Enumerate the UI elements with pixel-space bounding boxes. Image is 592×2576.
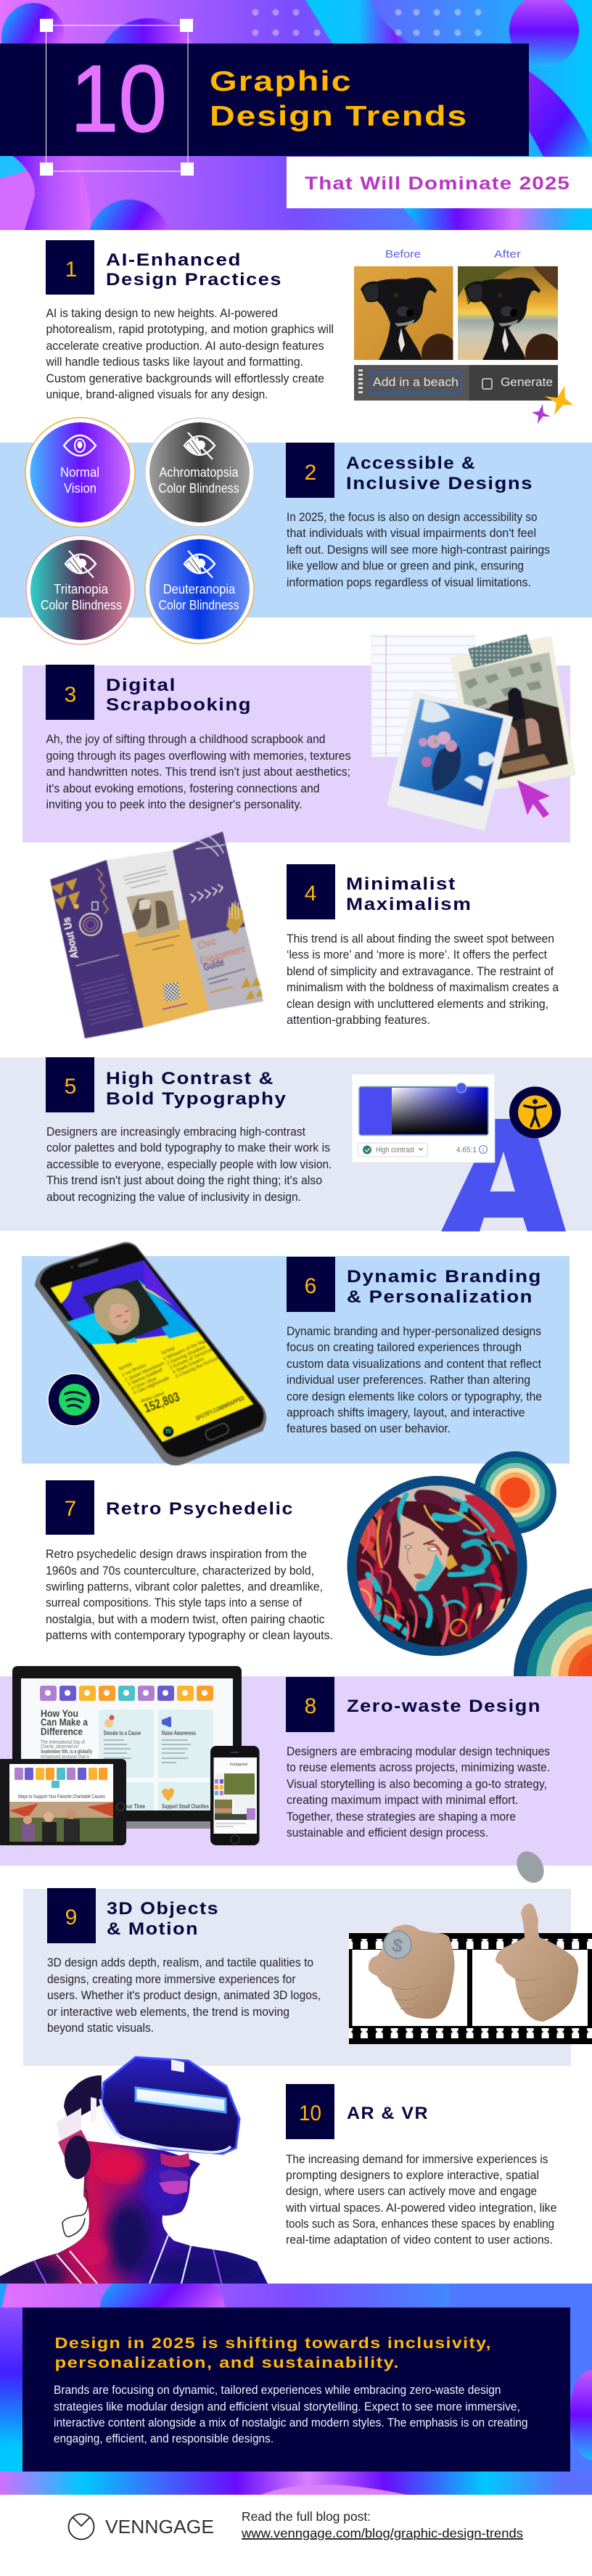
heading 1: Design Practices — [106, 270, 282, 290]
conclusion banner — [0, 2268, 592, 2495]
tablet: Ways to Support Your Favorite Charitable Causes — [18, 1793, 105, 1800]
heading 8: Zero-waste Design — [347, 1697, 541, 1716]
number badge 5: 5 — [65, 1075, 76, 1099]
circle: deuteranopia — [145, 535, 254, 644]
body text 8: creating maximum impact with minimal effort. — [287, 1793, 518, 1807]
heading 3: Digital — [106, 676, 176, 695]
concentric rings small — [474, 1451, 556, 1534]
image: responsive devices mockup — [0, 1666, 260, 1845]
selection frame — [40, 19, 194, 176]
circle: achromatopsia: Color Blindness — [158, 481, 239, 496]
laptop: Donate to a Cause — [104, 1730, 141, 1736]
blog link: Read the full blog post: — [242, 2509, 371, 2524]
body text 1: photorealism, rapid prototyping, and motion graphics will — [46, 322, 334, 336]
image: brochure: Guide — [202, 956, 226, 973]
image: phone with wrapped screen: SPOTIFY.COM/WRAPPED — [194, 1394, 246, 1422]
body text 4: clean design with uncluttered elements and striking, — [287, 997, 548, 1011]
panel: trend 2 — [0, 418, 592, 644]
body text 2: In 2025, the focus is also on design accessibility so — [287, 510, 537, 524]
body text 7: patterns with contemporary typography or clean layouts. — [46, 1628, 333, 1642]
body text 6: custom data visualizations and content that reflect — [287, 1357, 541, 1371]
body text 10: prompting designers to explore interactive, spatial — [286, 2168, 539, 2182]
body text 2 — [287, 510, 550, 589]
number badge 10 — [286, 2084, 334, 2139]
circle: deuteranopia: Color Blindness — [158, 598, 239, 612]
body text 5: accessible to everyone, especially people with low vision. — [46, 1157, 332, 1171]
blog link: www.venngage.com/blog/graphic-design-trends — [241, 2526, 523, 2540]
heading 3 — [106, 676, 252, 715]
panel: trend 8 — [0, 1666, 592, 1887]
heading 6: & Personalization — [347, 1287, 533, 1307]
number badge 6: 6 — [305, 1274, 316, 1298]
prompt bar: Generate — [501, 375, 553, 389]
panel: trend 10 — [0, 2057, 557, 2289]
heading 3: Scrapbooking — [106, 695, 252, 715]
body text 7: nostalgia, but with a modern twist, often pairing chaotic — [46, 1612, 325, 1626]
body text 5 — [46, 1125, 332, 1204]
body text 10: with virtual spaces. AI-powered video integration, like — [285, 2201, 557, 2215]
panel: trend 4 — [50, 832, 559, 1038]
title: Design Trends — [210, 101, 468, 132]
number badge 5 — [46, 1057, 94, 1112]
big number 10: 10 — [70, 45, 167, 152]
number badge 4: 4 — [305, 882, 316, 906]
laptop: How You — [41, 1707, 78, 1719]
body text 8: to reuse elements across projects, minimizing waste. — [287, 1760, 550, 1774]
title band — [0, 44, 529, 156]
circle: tritanopia: Color Blindness — [41, 598, 122, 612]
heading 5 — [106, 1069, 287, 1109]
icon: hand with coin: $ — [390, 1934, 406, 1957]
heading 9 — [107, 1899, 219, 1939]
number badge 2 — [286, 443, 334, 498]
number badge 4 — [287, 864, 335, 919]
heading 9: 3D Objects — [107, 1899, 219, 1919]
concentric rings large — [514, 1588, 592, 1676]
body text 9: users. Whether it's product design, animated 3D logos, — [47, 1988, 321, 2002]
circle: deuteranopia: Deuteranopia — [163, 582, 236, 596]
laptop: Difference — [41, 1726, 83, 1737]
image: phone with wrapped screen: 2 Dancing Shadows — [166, 1345, 207, 1366]
body text 1 — [46, 306, 334, 401]
body text 8: Together, these strategies are shaping a more — [287, 1810, 516, 1824]
contrast checker card: High contrast — [376, 1146, 414, 1154]
body text 8: sustainable and efficient design process. — [287, 1826, 488, 1839]
laptop: Raise Awareness — [162, 1730, 196, 1736]
laptop: The International Day of — [41, 1740, 85, 1745]
icon: spinning coin — [511, 1847, 549, 1887]
image: phone with wrapped screen: 5 Chasing the Horizon — [175, 1355, 220, 1379]
body text 8: Visual storytelling is also becoming a go-to strategy, — [287, 1777, 547, 1791]
body text 10: The increasing demand for immersive experiences is — [286, 2152, 548, 2166]
body text 1: accelerate creative production. AI auto-design features — [46, 339, 324, 353]
laptop — [12, 1666, 242, 1829]
body text 6: focus on creating tailored experiences through — [287, 1340, 522, 1354]
body text 6: core design elements like colors or typography, the — [287, 1390, 542, 1403]
body text 3 — [46, 732, 351, 811]
image: phone with wrapped screen: 1 Whispers of the Night — [163, 1337, 210, 1362]
panel: trend 9 — [23, 1888, 592, 2066]
tablet — [0, 1759, 126, 1845]
body text 7 — [46, 1547, 333, 1642]
image: scrapbook collage — [371, 634, 576, 831]
image: brochure: Engagement — [198, 943, 246, 967]
image: phone with wrapped screen: 4 Starlit Dreams — [172, 1356, 205, 1375]
body text 3: inviting you to peek into the designer's personality. — [46, 797, 302, 811]
smartphone: Instagram — [230, 1763, 248, 1767]
heading 4 — [346, 874, 472, 914]
number badge 8 — [286, 1677, 334, 1732]
image: phone with wrapped screen: 152,803 — [142, 1390, 181, 1416]
body text 2: left out. Designs will see more high-contrast pairings — [287, 543, 550, 557]
circle: achromatopsia — [145, 418, 254, 527]
panel: trend 3 — [22, 634, 576, 842]
smartphone — [210, 1746, 260, 1845]
circle: normal vision: Vision — [64, 481, 96, 496]
laptop: Charity, observed on — [41, 1744, 78, 1750]
icon: cursor arrow — [517, 780, 550, 818]
footer — [68, 2509, 523, 2540]
image: phone with wrapped screen: Minutes Listened — [140, 1391, 165, 1404]
number badge 3: 3 — [65, 683, 76, 707]
body text 4 — [287, 932, 559, 1027]
number badge 6 — [287, 1257, 335, 1312]
body text 7: surreal compositions. This style taps into a sense of — [46, 1596, 302, 1609]
conclusion body text: interactive content alongside a mix of nostalgic and modern styles. The emphasis is on creating — [54, 2416, 528, 2429]
panel: trend 5 — [0, 1057, 592, 1231]
heading 2: Accessible & — [346, 454, 476, 473]
heading 6: Dynamic Branding — [347, 1267, 542, 1287]
image: phone with wrapped screen: 4 Orion Skye — [131, 1376, 157, 1392]
body text 1: AI is taking design to new heights. AI-powered — [46, 306, 278, 320]
venngage logo: VENNGAGE — [105, 2516, 214, 2538]
body text 10: tools such as Sora, enhances these spaces by enabling — [286, 2217, 554, 2231]
headset — [100, 2057, 239, 2154]
body text 9: or interactive web elements, the trend is moving — [47, 2005, 289, 2019]
number badge 1 — [46, 240, 94, 295]
subtitle box: That Will Dominate 2025 — [305, 173, 570, 194]
body text 9: designs, creating more immersive experiences for — [47, 1972, 296, 1986]
image: brochure: About Us — [60, 916, 81, 960]
body text 7: swirling patterns, vibrant color palettes, and dreamlike, — [46, 1580, 323, 1593]
image: phone with wrapped screen: Top Artists — [118, 1361, 133, 1372]
body text 5: Designers are increasingly embracing high-contrast — [46, 1125, 305, 1139]
heading 6 — [347, 1267, 542, 1307]
title — [210, 66, 468, 132]
body text 10: real-time adaptation of video content to user actions. — [286, 2233, 553, 2247]
panel: trend 7 — [46, 1451, 592, 1676]
image: phone with wrapped screen: 1 Ivy Brooks — [121, 1363, 147, 1378]
icon: spotify badge — [48, 1374, 100, 1426]
conclusion heading — [55, 2335, 492, 2371]
conclusion heading: personalization, and sustainability. — [55, 2355, 400, 2371]
body text 5: This trend isn't just about doing the right thing; it's also — [46, 1173, 322, 1187]
blog link — [241, 2509, 523, 2540]
body text 7: Retro psychedelic design draws inspiration from the — [46, 1547, 307, 1561]
contrast checker card — [352, 1074, 495, 1162]
icon: thumbs-up hand — [496, 1903, 578, 2022]
conclusion box — [22, 2308, 570, 2472]
panel: trend 6 — [22, 1242, 570, 1466]
before and after images: After — [494, 248, 521, 261]
body text 8 — [287, 1744, 550, 1839]
laptop: recognized occasion that is — [41, 1755, 89, 1760]
number badge 9 — [47, 1888, 96, 1943]
prompt bar — [354, 365, 558, 401]
heading 2 — [346, 454, 533, 493]
subtitle box — [287, 157, 592, 208]
body text 4: minimalism with the boldness of maximalism creates a — [287, 980, 559, 994]
contrast checker card: 4.65:1 — [456, 1146, 477, 1154]
icon: sparkle stars — [532, 386, 573, 424]
circle: normal vision: Normal — [60, 465, 99, 480]
number badge 7 — [46, 1480, 94, 1535]
body text 3: and handwritten notes. This trend isn't just about aesthetics; — [46, 765, 350, 779]
body text 2: that individuals with visual impairments don't feel — [287, 526, 536, 540]
body text 5: about recognizing the value of inclusivity in design. — [46, 1190, 301, 1204]
header banner — [0, 0, 592, 230]
heading 10: AR & VR — [347, 2104, 429, 2123]
image: phone with wrapped screen: 2 Jasper Moonbeam — [124, 1361, 165, 1383]
prompt bar: Add in a beach — [373, 375, 459, 389]
heading 4: Maximalism — [346, 895, 472, 914]
number badge 10: 10 — [299, 2101, 321, 2125]
conclusion body text: strategies like modular design and efficient visual storytelling. Expect to see more immersive, — [54, 2400, 520, 2413]
body text 9 — [47, 1956, 321, 2035]
circle: tritanopia: Tritanopia — [54, 582, 109, 596]
body text 1: will handle tedious tasks like layout and formatting. — [46, 355, 303, 369]
conclusion heading: Design in 2025 is shifting towards inclusivity, — [55, 2335, 492, 2352]
number badge 3 — [46, 665, 94, 720]
image: phone with wrapped screen: 5 Cleo Nightshade — [133, 1376, 170, 1396]
conclusion body text: Brands are focusing on dynamic, tailored experiences while embracing zero-waste design — [54, 2383, 501, 2397]
icon: accessibility — [509, 1087, 561, 1138]
contrast checker card: i — [482, 1147, 484, 1154]
body text 6 — [287, 1324, 542, 1435]
heading 4: Minimalist — [346, 874, 456, 894]
heading 5: High Contrast & — [106, 1069, 274, 1088]
body text 6: Dynamic branding and hyper-personalized designs — [287, 1324, 541, 1338]
heading 1: AI-Enhanced — [106, 250, 242, 270]
body text 6: individual user preferences. Rather than altering — [287, 1373, 530, 1387]
body text 2: like yellow and blue or green and pink, ensuring — [287, 559, 524, 573]
conclusion body text — [54, 2383, 528, 2445]
circle: normal vision — [25, 418, 135, 527]
body text 7: 1960s and 70s counterculture, characterized by bold, — [46, 1564, 314, 1578]
body text 3: it's about evoking emotions, fostering connections and — [46, 782, 319, 795]
body text 1: unique, brand-aligned visuals for any design. — [46, 387, 268, 401]
image: phone with wrapped screen: 3 Sienna Goldleaf — [127, 1367, 163, 1387]
body text 2: information pops regardless of visual limitations. — [287, 575, 531, 589]
laptop: Support Small Charities — [162, 1803, 209, 1810]
venngage logo — [68, 2514, 214, 2540]
body text 10 — [285, 2152, 557, 2247]
laptop: September 5th, is a globally — [41, 1750, 92, 1755]
body text 8: Designers are embracing modular design techniques — [287, 1744, 550, 1758]
heading 1 — [106, 250, 282, 290]
circle: achromatopsia: Achromatopsia — [160, 465, 239, 480]
heading 7: Retro Psychedelic — [106, 1499, 294, 1519]
laptop: Can Make a — [41, 1716, 88, 1728]
title: Graphic — [210, 66, 353, 97]
body text 4: blend of simplicity and extravagance. The restraint of — [287, 964, 554, 978]
body text 10: design, where users can actively move and engage — [286, 2184, 537, 2198]
image: brochure: Civic — [196, 935, 218, 951]
number badge 9: 9 — [65, 1906, 77, 1929]
panel: trend 1 — [46, 240, 573, 424]
body text 1: Custom generative backgrounds will effortlessly create — [46, 372, 324, 385]
body text 6: features based on user behavior. — [287, 1422, 451, 1435]
image: phone with wrapped screen: Top Songs — [160, 1345, 176, 1356]
film strip — [349, 1933, 592, 2044]
image: person in VR headset — [0, 2057, 268, 2289]
heading 5: Bold Typography — [106, 1089, 287, 1109]
image: brochure — [50, 832, 263, 1038]
big letter A — [441, 1119, 566, 1231]
conclusion body text: engaging, efficient, and responsible designs. — [54, 2432, 274, 2445]
image: psychedelic portrait — [347, 1476, 527, 1656]
icon: hand with coin — [369, 1924, 455, 2019]
laptop: our Time — [125, 1803, 145, 1810]
before and after images — [354, 250, 558, 360]
number badge 7: 7 — [65, 1497, 76, 1521]
body text 3: going through its pages overflowing with memories, textures — [46, 749, 351, 763]
number badge 8: 8 — [305, 1694, 316, 1718]
body text 4: ‘less is more’ and ‘more is more’. It offers the perfect — [287, 948, 547, 961]
body text 4: This trend is all about finding the sweet spot between — [287, 932, 554, 946]
body text 9: 3D design adds depth, realism, and tactile qualities to — [47, 1956, 313, 1969]
image: phone with wrapped screen — [35, 1242, 266, 1466]
circle: tritanopia — [26, 536, 135, 644]
before and after images: Before — [385, 248, 421, 261]
body text 5: color palettes and bold typography to make their work is — [46, 1141, 330, 1154]
heading 2: Inclusive Designs — [346, 474, 533, 493]
number badge 2: 2 — [305, 461, 316, 485]
number badge 1: 1 — [65, 258, 77, 282]
body text 4: attention-grabbing features. — [287, 1013, 430, 1027]
body text 6: approach shifts imagery, layout, and interactive — [287, 1406, 525, 1419]
body text 3: Ah, the joy of sifting through a childhood scrapbook and — [46, 732, 325, 746]
image: phone with wrapped screen: 3 Echoes of Tomorrow — [169, 1347, 214, 1371]
body text 9: beyond static visuals. — [47, 2021, 154, 2035]
heading 9: & Motion — [107, 1919, 199, 1939]
